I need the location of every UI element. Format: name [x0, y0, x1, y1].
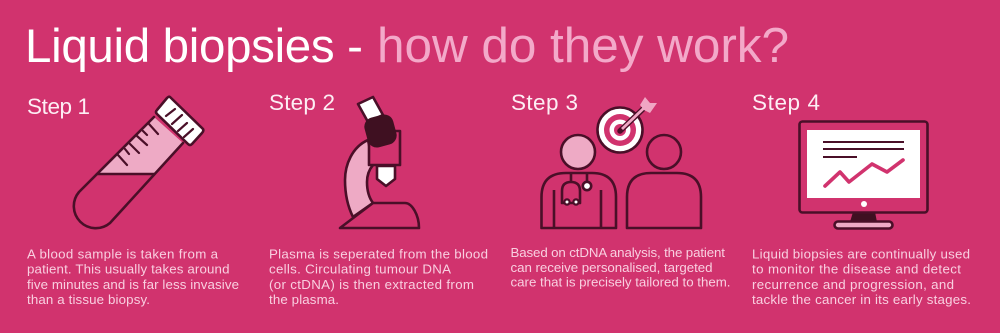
step 3 description: care that is precisely tailored to them.	[510, 274, 730, 290]
step 4 description: tackle the cancer in its early stages.	[752, 292, 971, 307]
step 4 description: Liquid biopsies are continually used	[752, 246, 970, 262]
step 3 heading: Step 3	[511, 90, 578, 115]
step 4 description: to monitor the disease and detect	[752, 262, 961, 276]
step 4 description	[752, 246, 971, 307]
step 3 description	[510, 245, 730, 290]
icon: microscope	[340, 97, 419, 228]
step 2 description	[269, 246, 488, 307]
icon: patient	[627, 135, 701, 228]
step 1 description: patient. This usually takes around	[27, 262, 230, 276]
step 4 heading: Step 4	[752, 90, 820, 115]
step 2 heading: Step 2	[269, 90, 335, 115]
icon: test tube	[74, 97, 203, 228]
step 2 description: Plasma is seperated from the blood	[269, 246, 488, 262]
step 4 panel	[752, 90, 971, 307]
step 1 description: A blood sample is taken from a	[27, 246, 219, 262]
icon: doctor	[542, 135, 616, 228]
step 2 description: (or ctDNA) is then extracted from	[269, 277, 474, 292]
step 3 description: Based on ctDNA analysis, the patient	[510, 245, 725, 260]
step 3 description: can receive personalised, targeted	[510, 260, 712, 275]
step 2 panel	[269, 90, 488, 307]
title: how do they work?	[377, 18, 789, 73]
icon: computer monitor with chart	[800, 122, 928, 228]
step 3 panel	[510, 90, 730, 290]
step 1 panel	[27, 94, 239, 307]
step 2 description: the plasma.	[269, 292, 339, 307]
step 1 description: five minutes and is far less invasive	[27, 277, 239, 292]
title: Liquid biopsies -	[25, 20, 363, 73]
step 1 description: than a tissue biopsy.	[27, 292, 150, 307]
step 1 description	[27, 246, 239, 307]
title	[25, 18, 789, 73]
step 1 heading: Step 1	[27, 94, 90, 119]
step 4 description: recurrence and progression, and	[752, 277, 954, 292]
icon: target with arrow	[598, 97, 657, 152]
step 2 description: cells. Circulating tumour DNA	[269, 262, 451, 276]
